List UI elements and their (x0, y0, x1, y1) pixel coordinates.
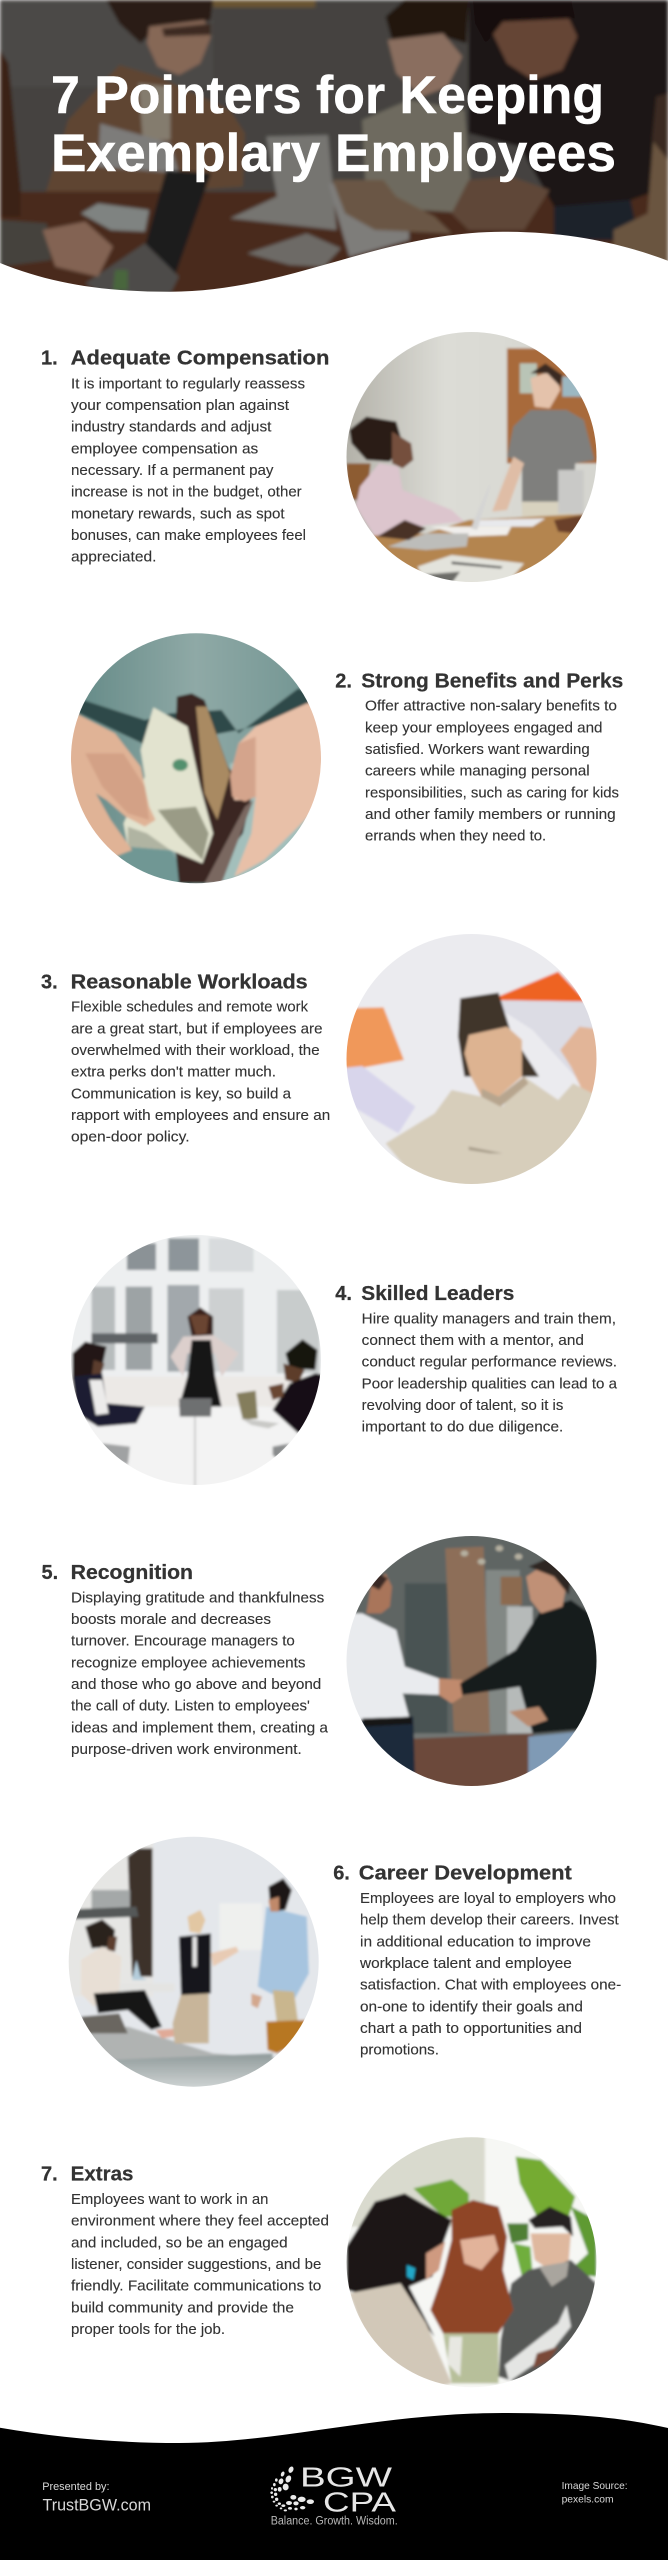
text block: workloads: Communication is key, so build a (71, 1086, 292, 1102)
panel: 7 extras (41, 2130, 614, 2397)
text block: workloads (71, 1000, 330, 1146)
footer: presented by (42, 2481, 151, 2515)
text block: career: Employees are loyal to employers who (360, 1891, 616, 1907)
face (464, 1027, 522, 1097)
heading: extras: 7. (41, 2164, 58, 2186)
man (499, 2260, 597, 2383)
left arm and hand (0, 220, 51, 267)
text block: extras: environment where they feel accepted (71, 2214, 329, 2230)
table (144, 1406, 278, 1410)
heading: strong benefits and perks: Strong Benefits and Perks (361, 671, 623, 693)
photo: three coworkers reading (332, 2130, 614, 2397)
text block: benefits: careers while managing personal (365, 764, 590, 780)
icon: dot swirl (270, 2466, 314, 2511)
dark hair woman (346, 2193, 452, 2337)
footer: presented by: TrustBGW.com (42, 2496, 151, 2515)
table (90, 2026, 274, 2061)
text block: workloads: are a great start, but if employees are (71, 1021, 322, 1037)
panel: 5 recognition (42, 1530, 614, 1797)
heading: reasonable workloads: 3. (41, 971, 58, 993)
heading: extras (41, 2164, 133, 2186)
hero photo banner (0, 0, 668, 302)
text block: workloads: overwhelmed with their workload, the (71, 1043, 320, 1059)
footer: image source: Image Source: (562, 2480, 628, 2492)
text block: compensation: appreciated. (71, 550, 156, 566)
photo: two colleagues at a table (346, 332, 596, 582)
text block: benefits: errands when they need to. (365, 829, 546, 845)
text block: career: in additional education to improve (360, 1934, 591, 1950)
logo: BGW CPA (270, 2462, 398, 2527)
blouse (349, 2283, 452, 2390)
woman standing (507, 410, 594, 507)
text block: workloads: rapport with employees and ensure an (71, 1108, 330, 1124)
text block: career: promotions. (360, 2043, 439, 2059)
text block: leaders (362, 1311, 618, 1436)
text block: extras: proper tools for the job. (71, 2322, 225, 2338)
shirt (386, 1076, 592, 1184)
text block: benefits (365, 699, 619, 845)
text block: compensation: increase is not in the budget, other (71, 485, 302, 501)
text block: recognition: boosts morale and decreases (71, 1612, 271, 1628)
text block: career: workplace talent and employee (359, 1956, 572, 1972)
bills (124, 707, 213, 863)
left man (362, 1716, 416, 1772)
photo: stressed man with papers (346, 934, 596, 1184)
text block: career (359, 1891, 621, 2059)
heading: skilled leaders: 4. (335, 1283, 352, 1305)
seated woman (85, 1919, 115, 1948)
title (51, 66, 616, 183)
text block: compensation: It is important to regularly reassess (71, 376, 305, 392)
footer band (0, 2413, 668, 2560)
girl sitting (356, 463, 464, 537)
text block: extras: friendly. Facilitate communications to (71, 2279, 321, 2295)
text block: leaders: revolving door of talent, so it is (362, 1398, 563, 1414)
photo: hands opening wallet (71, 633, 321, 884)
text block: compensation: necessary. If a permanent pay (71, 463, 274, 479)
text block: extras: listener, consider suggestions, and be (71, 2257, 321, 2273)
book (505, 2305, 571, 2382)
photo: handshake (346, 1536, 596, 1786)
heading: career development: Career Development (359, 1862, 572, 1884)
title: Exemplary Employees (51, 124, 616, 183)
table (374, 512, 584, 575)
heading: strong benefits and perks: 2. (335, 671, 352, 693)
text block: benefits: and other family members or running (365, 807, 616, 823)
text block: compensation: industry standards and adjust (71, 420, 271, 436)
right woman (285, 1339, 317, 1370)
panel: 1 adequate compensation (42, 332, 596, 582)
hero table (0, 192, 668, 302)
text block: recognition: turnover. Encourage managers to (71, 1634, 295, 1650)
text block: extras: build community and provide the (71, 2300, 294, 2316)
text block: compensation: your compensation plan against (71, 398, 289, 414)
text block: recognition: recognize employee achievements (71, 1655, 306, 1671)
heading: recognition: 5. (42, 1562, 58, 1584)
text block: compensation: monetary rewards, such as spot (71, 506, 285, 522)
right hand (232, 701, 321, 877)
text block: extras: Employees want to work in an (71, 2192, 268, 2208)
text block: career: help them develop their careers. Invest (360, 1913, 619, 1929)
text block: workloads: Flexible schedules and remote work (71, 1000, 309, 1016)
text block: compensation (71, 376, 306, 566)
panel: 2 strong benefits and perks (55, 627, 623, 890)
photo: meeting in a bright office (71, 1235, 321, 1485)
left woman (72, 1342, 107, 1380)
hair (458, 993, 539, 1077)
man (469, 0, 668, 207)
text block: recognition: and those who go above and beyond (71, 1677, 321, 1693)
text block: leaders: connect them with a mentor, and (362, 1333, 584, 1349)
text block: benefits: Offer attractive non-salary benefits to (365, 699, 617, 715)
text block: extras: and included, so be an engaged (71, 2235, 288, 2251)
footer: image source: pexels.com (562, 2493, 614, 2505)
text block: leaders: Hire quality managers and train them, (362, 1311, 616, 1327)
text block: benefits: keep your employees engaged and (365, 720, 602, 736)
text block: leaders: conduct regular performance reviews. (362, 1355, 617, 1371)
text block: workloads: extra perks don't matter much. (71, 1065, 276, 1081)
panel: 3 reasonable workloads (41, 927, 614, 1193)
woman (46, 65, 245, 192)
text block: recognition: Displaying gratitude and thankfulness (71, 1590, 324, 1606)
logo: BGW CPA: BGW (300, 2462, 393, 2493)
standing man (258, 1907, 309, 2000)
text block: career: chart a path to opportunities and (360, 2021, 582, 2037)
heading: adequate compensation: Adequate Compensation (71, 347, 329, 369)
heading: career development: 6. (333, 1862, 350, 1884)
standing woman (187, 1307, 213, 1337)
text block: leaders: Poor leadership qualities can lead to a (362, 1376, 618, 1392)
text block: recognition: purpose-driven work environment. (71, 1742, 302, 1758)
redhead (430, 2200, 513, 2337)
wallet (173, 693, 251, 883)
hand (560, 1026, 596, 1094)
logo: BGW CPA: Balance. Growth. Wisdom. (271, 2515, 398, 2527)
laptop (145, 170, 211, 277)
text block: career: on-one to identify their goals and (360, 1999, 583, 2015)
text block: workloads: open-door policy. (71, 1130, 190, 1146)
footer: image source (562, 2480, 628, 2505)
text block: recognition: ideas and implement them, creating a (71, 1720, 329, 1736)
chair (0, 50, 20, 217)
panel: 6 career development (55, 1830, 621, 2097)
woman 2 (362, 100, 473, 213)
papers, tablets (230, 135, 337, 230)
logo: BGW CPA: CPA (323, 2487, 396, 2518)
heading: reasonable workloads: Reasonable Workloads (71, 971, 308, 993)
text block: recognition: the call of duty. Listen to employees' (71, 1699, 310, 1715)
standing woman (187, 1910, 205, 1933)
heading: recognition: Recognition (71, 1562, 193, 1584)
text block: compensation: bonuses, can make employees feel (71, 528, 306, 544)
heading: skilled leaders: Skilled Leaders (361, 1283, 514, 1305)
right man (526, 1730, 576, 1773)
text block: extras (71, 2192, 329, 2338)
text block: benefits: responsibilities, such as caring for kids (365, 785, 619, 801)
hands (439, 1678, 462, 1703)
heading: adequate compensation: 1. (41, 347, 58, 369)
left hand (71, 713, 156, 857)
text block: recognition (71, 1590, 329, 1758)
text block: leaders: important to do due diligence. (362, 1420, 563, 1436)
text block: benefits: satisfied. Workers want rewarding (365, 742, 590, 758)
footer: presented by: Presented by: (42, 2481, 110, 2493)
photo: team at a whiteboard (68, 1836, 319, 2087)
panel: 4 skilled leaders (55, 1230, 618, 1497)
title: 7 Pointers for Keeping (51, 66, 604, 125)
text block: compensation: employee compensation as (71, 441, 258, 457)
heading: extras: Extras (71, 2164, 133, 2186)
text block: career: satisfaction. Chat with employees one- (360, 1978, 621, 1994)
